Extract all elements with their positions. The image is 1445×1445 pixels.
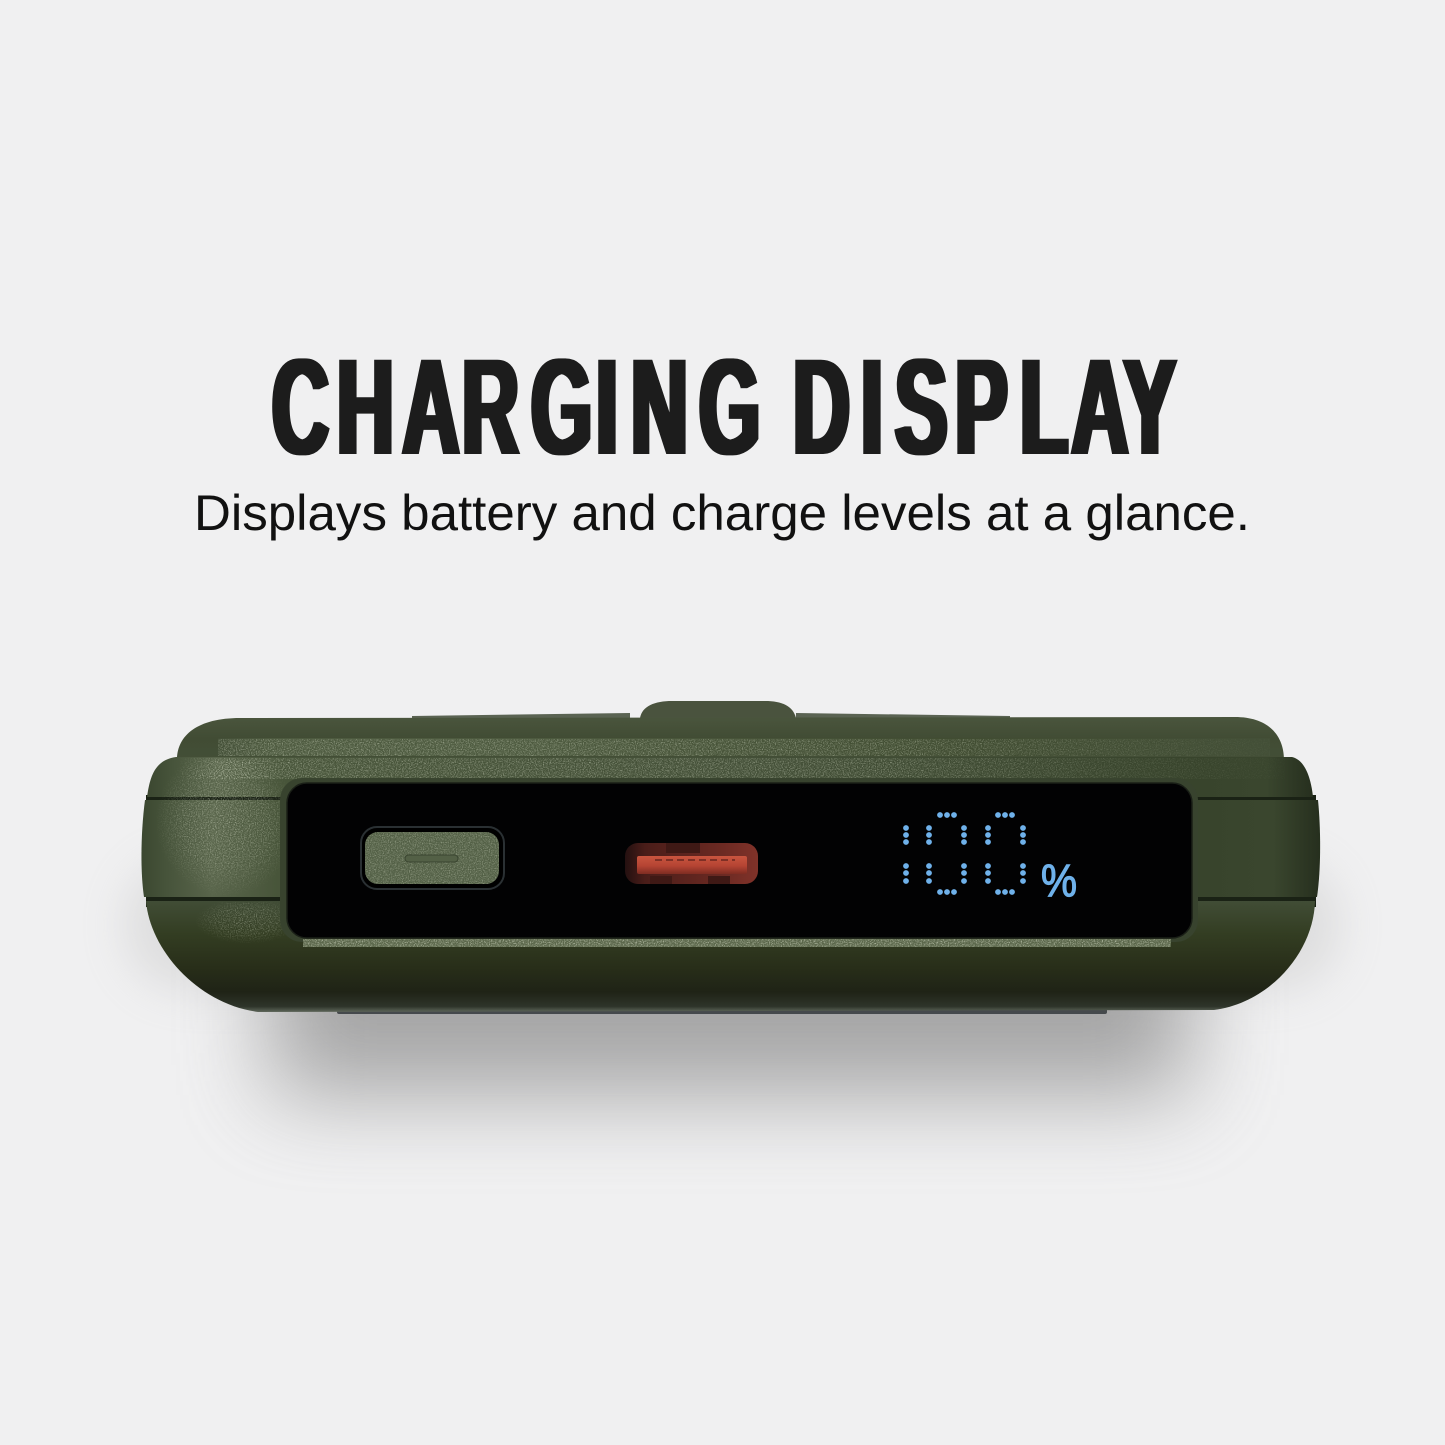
lower shell [146, 901, 1315, 1012]
middle shell top [147, 757, 1313, 797]
battery level dot-matrix readout [903, 812, 1077, 906]
black display panel [287, 783, 1192, 938]
drop shadow under device [125, 860, 1340, 1095]
bottom edge line [337, 1008, 1107, 1014]
power bank device [141, 701, 1320, 1014]
subtitle: Displays battery and charge levels at a glance. [194, 485, 1250, 541]
screen recess [280, 778, 1198, 942]
top knob [640, 701, 796, 718]
rear edge lines [412, 713, 1010, 718]
upper shell textured band [218, 738, 1270, 756]
body backing [146, 795, 1316, 907]
grain texture left side [155, 760, 285, 897]
grain texture lower left [195, 902, 290, 944]
title: CHARGING DISPLAY [272, 330, 1176, 483]
grain texture bands [180, 739, 1285, 779]
USB-C port [625, 843, 758, 884]
upper shell [177, 717, 1284, 760]
lower row 100 dots [903, 863, 1026, 895]
upper row 100 dots [903, 812, 1026, 845]
power button [361, 827, 504, 889]
textured strip under screen [303, 939, 1171, 947]
percent sign: % [1041, 855, 1077, 906]
middle shell centre [141, 800, 1320, 897]
